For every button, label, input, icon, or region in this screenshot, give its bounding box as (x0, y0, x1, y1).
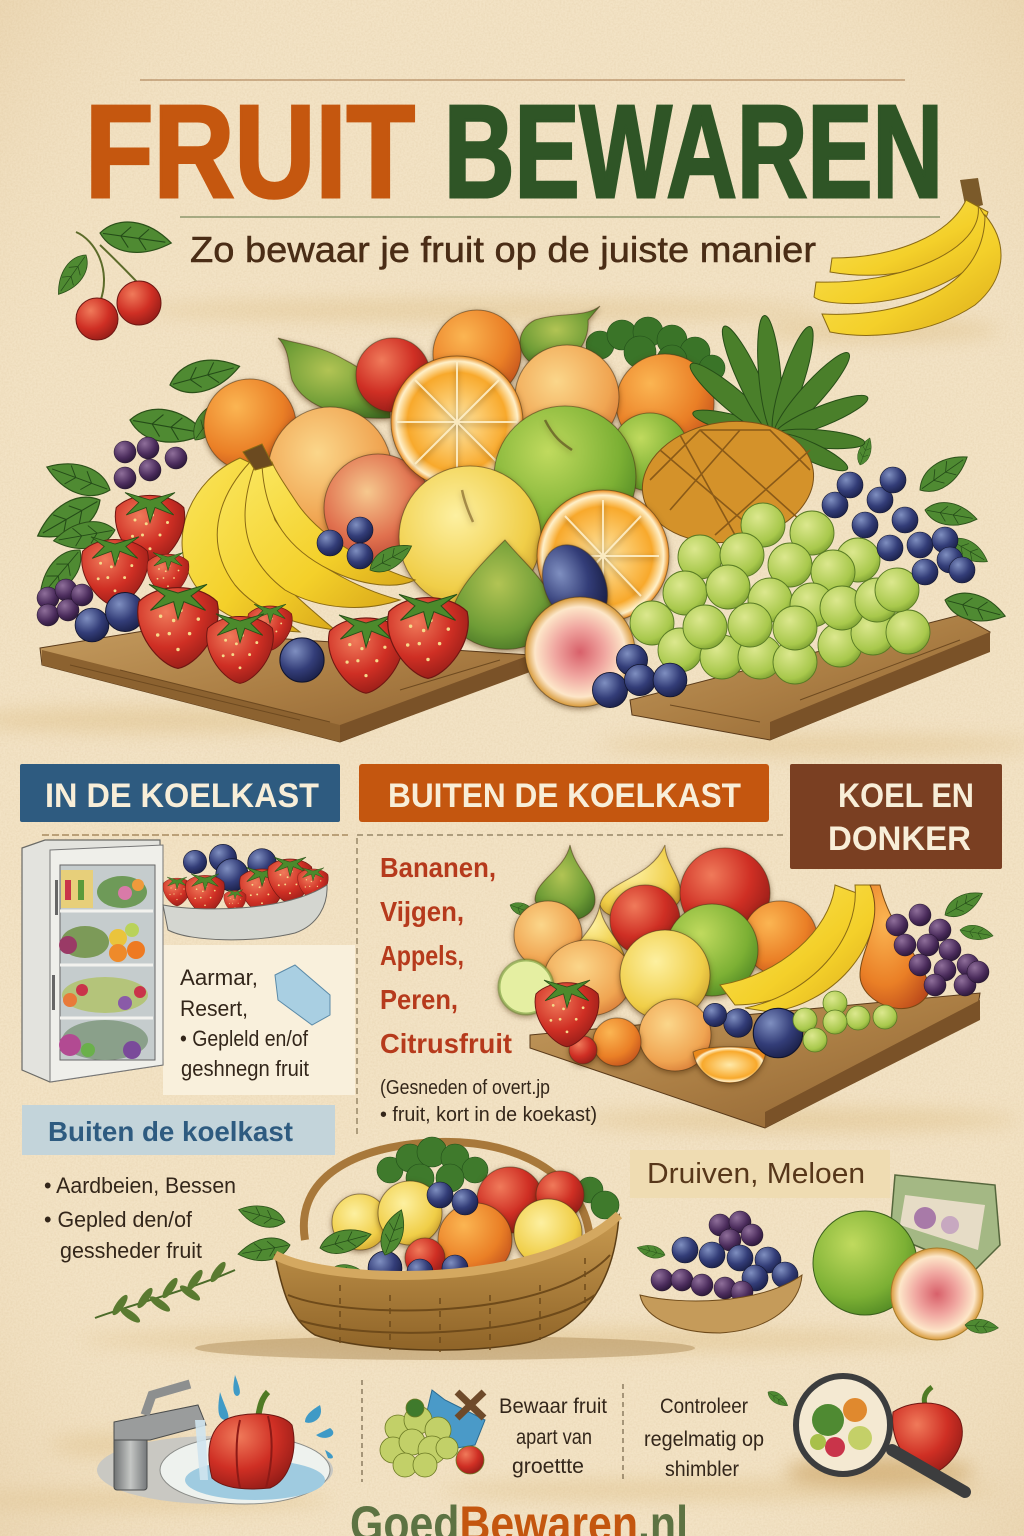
text: controleer regelmatig (644, 1395, 764, 1481)
label: druiven meloen: Druiven, Meloen (647, 1158, 865, 1190)
citrus and apples (391, 356, 669, 707)
pineapple (634, 314, 871, 553)
text: aarmar list: • Gepleld en/of (180, 1026, 309, 1051)
header: koel en donker: DONKER (828, 820, 971, 858)
header: in de koelkast: IN DE KOELKAST (45, 777, 319, 815)
icon: bananas top right (814, 178, 1001, 335)
icon: cherries (50, 218, 173, 340)
text: buiten bullets (44, 1173, 236, 1263)
text: aarmar list: Resert, (180, 996, 248, 1021)
text: note: (Gesneden of overt.jp (380, 1077, 550, 1099)
header: buiten de koelkast (359, 764, 769, 822)
sub-heading: buiten de koelkast: Buiten de koelkast (48, 1116, 293, 1147)
panel: in de koelkast (22, 835, 355, 1095)
bananas (182, 444, 415, 632)
pears and back fruits (204, 306, 714, 562)
text: controleer regelmatig: Controleer (660, 1395, 748, 1418)
text: bewaar fruit apart (499, 1395, 607, 1478)
title (85, 78, 943, 225)
label: druiven meloen (630, 1150, 890, 1198)
tip: check regularly (644, 1376, 965, 1492)
text: fruit list: Peren, (380, 984, 458, 1015)
text: note (380, 1077, 597, 1126)
divider (361, 1380, 363, 1482)
text: bewaar fruit apart: Bewaar fruit (499, 1395, 607, 1418)
icon: bell pepper (209, 1392, 294, 1489)
text: aarmar list (180, 965, 309, 1081)
text: fruit list (380, 852, 512, 1059)
icon: faucet (114, 1384, 206, 1490)
icon: magnifier (796, 1376, 965, 1492)
icon: bowl of berries (163, 844, 328, 940)
icon: plastic bag (275, 965, 330, 1025)
sub-heading: buiten de koelkast (22, 1105, 335, 1155)
text: buiten bullets: • Aardbeien, Bessen (44, 1173, 236, 1198)
illustration: melon and fig (813, 1175, 1000, 1340)
hero fruit pile illustration (30, 306, 1009, 742)
icon: cross over bag (425, 1390, 485, 1450)
icon: herb sprig (95, 1260, 235, 1325)
text: fruit list: Citrusfruit (380, 1028, 512, 1059)
title: FRUIT (85, 78, 415, 225)
text: buiten bullets: gessheder fruit (60, 1238, 202, 1263)
text: bewaar fruit apart: apart van (516, 1426, 592, 1449)
text: controleer regelmatig: shimbler (665, 1458, 739, 1481)
header: buiten de koelkast: BUITEN DE KOELKAST (388, 777, 741, 815)
dark grapes (37, 437, 975, 626)
illustration: fruit on board (499, 845, 994, 1128)
panel: buiten de koelkast (357, 835, 994, 1135)
header: koel en donker: KOEL EN (838, 777, 974, 815)
text: fruit list: Vijgen, (380, 896, 464, 927)
icon: pepper (893, 1387, 962, 1475)
illustration: basket of fruit (195, 1137, 695, 1360)
header: koel en donker (790, 764, 1002, 869)
text: aarmar list: geshnegn fruit (181, 1056, 309, 1081)
subtitle: Zo bewaar je fruit op de juiste manier (190, 229, 816, 270)
text: note: • fruit, kort in de koekast) (380, 1104, 597, 1126)
illustration: grapes in bowl (636, 1211, 802, 1333)
wooden boards (40, 615, 990, 742)
green grapes cluster (630, 503, 930, 684)
text: aarmar list: Aarmar, (180, 965, 258, 990)
icon: cauliflower (380, 1399, 484, 1477)
text: controleer regelmatig: regelmatig op (644, 1428, 764, 1451)
text: fruit list: Appels, (380, 940, 464, 971)
tip: store apart from vegetables (380, 1390, 607, 1478)
text: bewaar fruit apart: groettte (512, 1455, 584, 1478)
front berries (75, 492, 687, 708)
text: buiten bullets: • Gepled den/of (44, 1207, 193, 1232)
header: in de koelkast (20, 764, 340, 822)
tip: wash fruit under tap (97, 1375, 333, 1504)
back leaves (30, 352, 1009, 628)
divider (622, 1384, 624, 1482)
icon: fridge (22, 840, 163, 1082)
text: fruit list: Bananen, (380, 852, 496, 883)
icon: water drops (195, 1375, 333, 1480)
herbs (586, 317, 725, 381)
